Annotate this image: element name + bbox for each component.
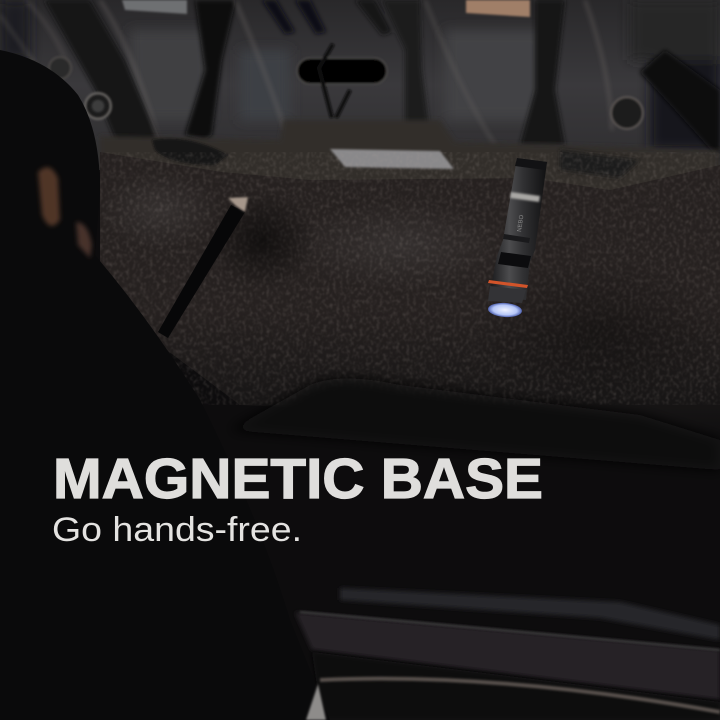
subtitle: Go hands-free. (52, 511, 302, 549)
upper engine bay panel (0, 0, 720, 170)
labels on top panel (122, 0, 530, 17)
small round bolts (49, 57, 643, 129)
raised ledge band (100, 120, 720, 195)
oval slot and hook (297, 44, 387, 118)
prop rod (158, 197, 248, 338)
top right bracket (640, 50, 720, 160)
flashlight: NEBO (517, 214, 525, 232)
bottom engine parts (55, 588, 720, 720)
carpet insulation (100, 152, 720, 470)
person silhouette (0, 50, 330, 720)
flashlight (488, 158, 547, 318)
title: MAGNETIC BASE (53, 447, 543, 511)
